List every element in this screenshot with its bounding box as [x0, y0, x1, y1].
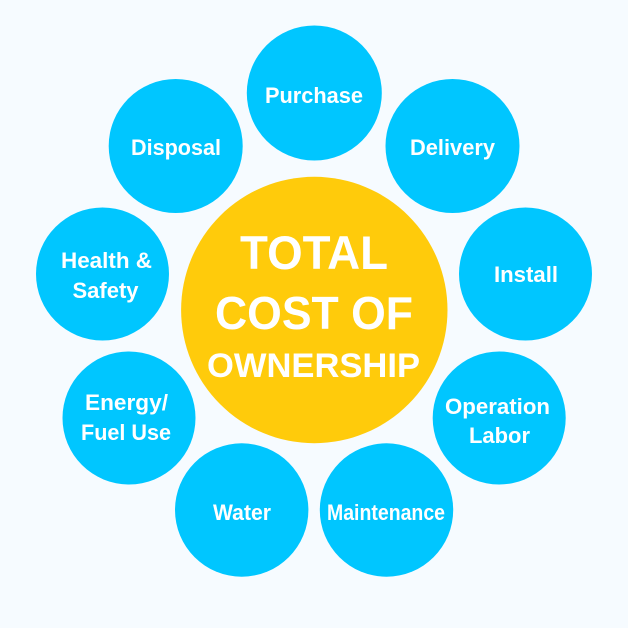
- center circle: total cost of ownership: OWNERSHIP: [207, 347, 420, 385]
- circle: Maintenance: [320, 443, 453, 577]
- circle: Water: Water: [213, 500, 271, 525]
- circle: Energy/Fuel Use: Fuel Use: [81, 420, 171, 445]
- circle: Purchase: Purchase: [265, 83, 363, 108]
- circle: Operation Labor: [433, 352, 566, 484]
- circle: Health & Safety: [36, 208, 169, 340]
- circle: Purchase: [247, 26, 382, 160]
- circle: Install: [459, 208, 592, 340]
- circle: Install: Install: [494, 262, 558, 287]
- circle: Operation Labor: Operation: [445, 394, 550, 419]
- circle: Energy/Fuel Use: [62, 352, 196, 484]
- circle: Health & Safety: Health &: [61, 248, 152, 273]
- center circle: total cost of ownership: [181, 177, 448, 443]
- circle: Delivery: Delivery: [410, 135, 496, 160]
- circle: Maintenance: Maintenance: [327, 500, 445, 525]
- circle: Delivery: [386, 79, 520, 213]
- circle: Health & Safety: Safety: [72, 278, 139, 303]
- circle: Disposal: [109, 79, 243, 213]
- circle: Disposal: Disposal: [131, 135, 221, 160]
- circle: Water: [175, 443, 308, 577]
- center circle: total cost of ownership: COST OF: [215, 287, 413, 339]
- center circle: total cost of ownership: TOTAL: [240, 226, 388, 279]
- circle: Operation Labor: Labor: [469, 423, 530, 448]
- circle: Energy/Fuel Use: Energy/: [85, 390, 168, 415]
